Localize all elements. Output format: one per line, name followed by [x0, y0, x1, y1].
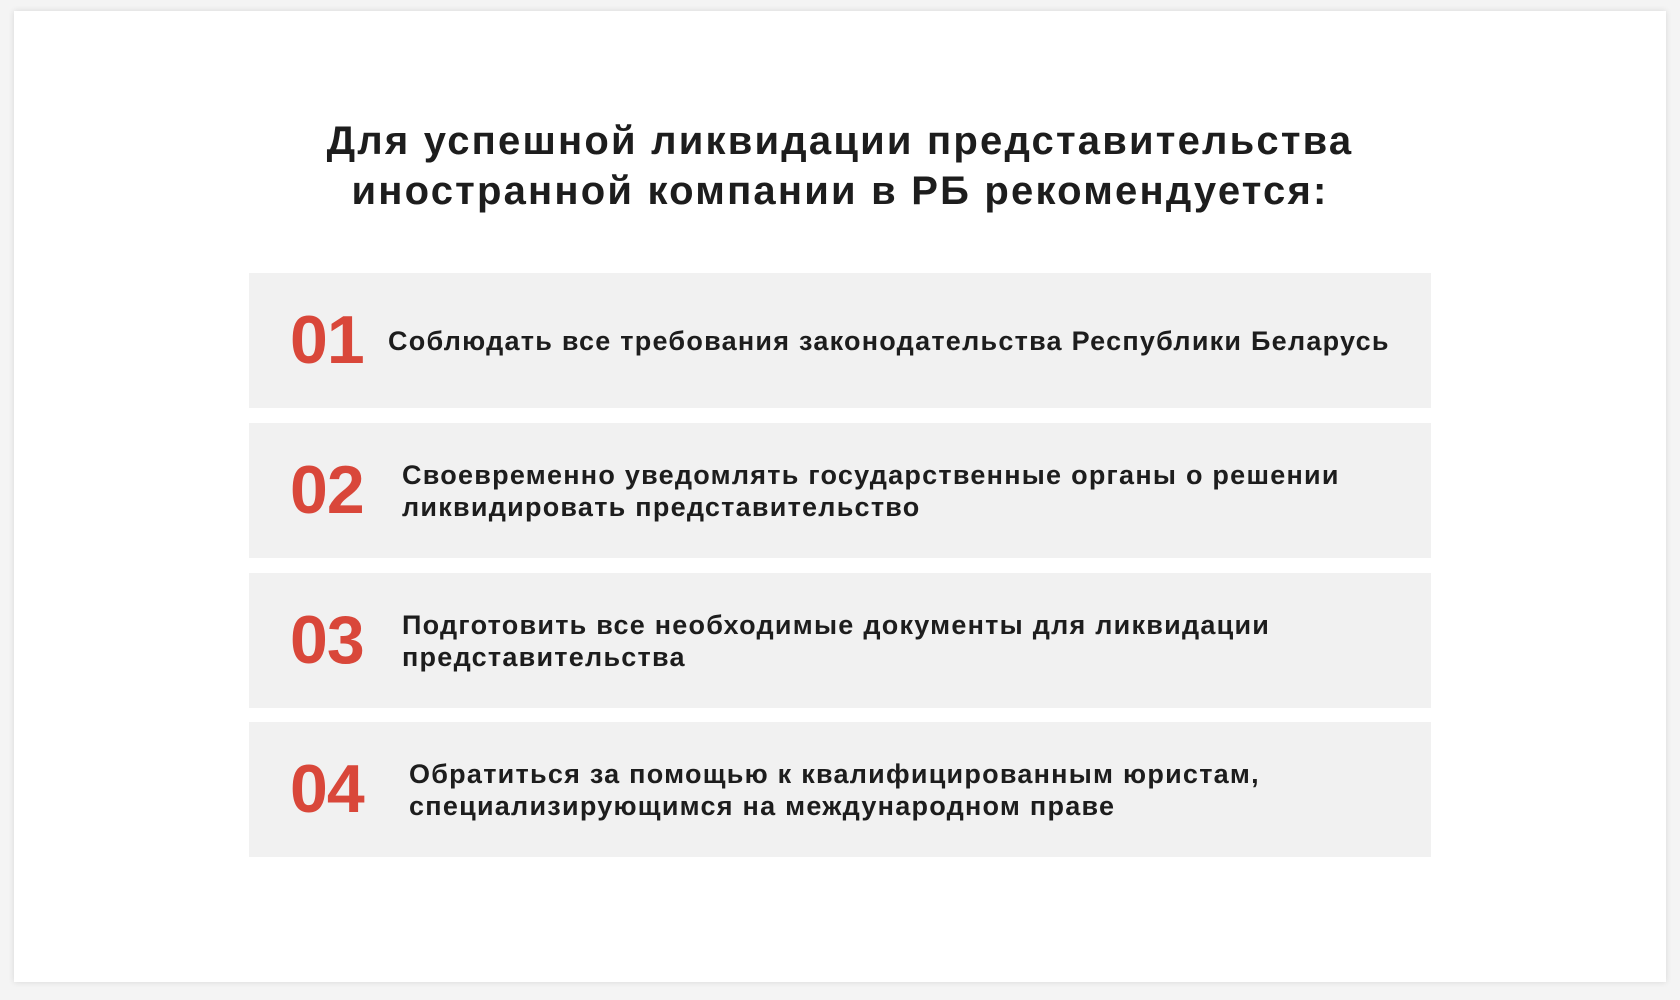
- title: иностранной компании в РБ рекомендуется:: [351, 169, 1329, 213]
- text 4: специализирующимся на международном праве: [409, 790, 1115, 820]
- title: [326, 119, 1353, 213]
- row 4: [249, 722, 1431, 857]
- text 1: Соблюдать все требования законодательства Республики Беларусь: [388, 326, 1390, 356]
- text 2: ликвидировать представительство: [402, 492, 921, 522]
- number 01: 01: [290, 302, 364, 378]
- number 02: 02: [290, 452, 364, 528]
- text 2: [402, 460, 1340, 522]
- title: Для успешной ликвидации представительства: [327, 119, 1353, 163]
- text 4: Обратиться за помощью к квалифицированным юристам,: [409, 758, 1260, 788]
- number 04: 04: [290, 751, 364, 827]
- text 2: Своевременно уведомлять государственные органы о решении: [402, 460, 1340, 490]
- number 03: 03: [290, 602, 364, 678]
- text 3: Подготовить все необходимые документы для ликвидации: [402, 610, 1270, 640]
- text 3: представительства: [402, 642, 686, 672]
- row 3: [249, 573, 1431, 708]
- row 2: [249, 423, 1431, 558]
- text 3: [402, 610, 1270, 672]
- text 4: [409, 758, 1260, 820]
- row 1: [249, 273, 1431, 408]
